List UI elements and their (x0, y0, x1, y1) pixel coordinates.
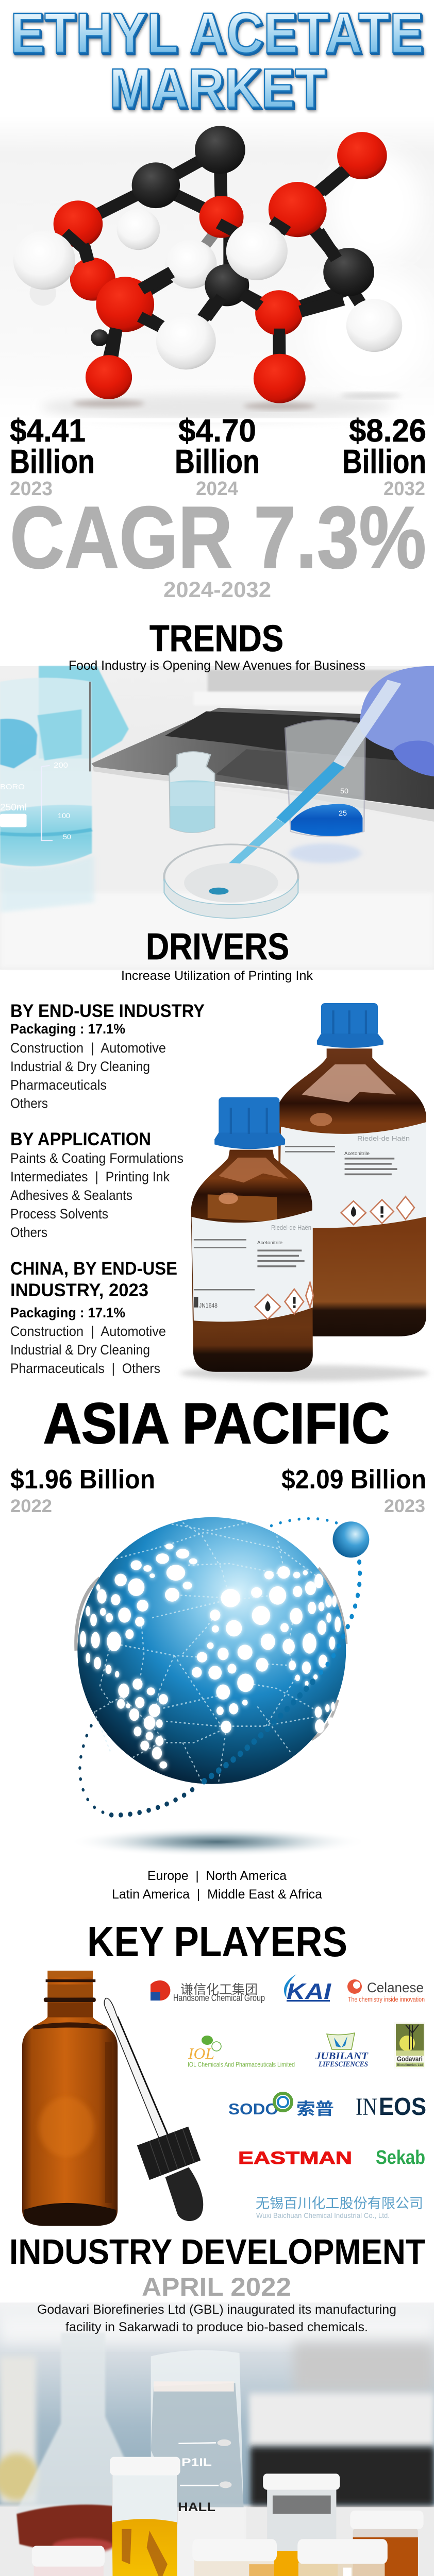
illustration: amber dropper bottle (22, 1971, 203, 2226)
stat: 2032 market size: 2032 (383, 478, 425, 500)
block: by application: Process Solvents (10, 1206, 108, 1222)
block: china by end-use industry: Industrial & Dry Cleaning (10, 1342, 150, 1358)
stat: asia pacific 2022 (10, 1465, 155, 1516)
block: china by end-use industry: Construction | Automotive (10, 1324, 166, 1339)
logo: INEOS (356, 2093, 426, 2121)
logo: Jubilant Life Sciences (315, 2033, 369, 2069)
logo: Eastman: EASTMAN (238, 2148, 352, 2168)
logo: Godavari Biorefineries: Godavari (397, 2055, 423, 2063)
illustration: globe with orbit (68, 1517, 369, 1857)
stat: asia pacific 2023: 2023 (384, 1496, 425, 1516)
illustration: ball-and-stick molecule (13, 126, 402, 410)
logo: Godavari Biorefineries (394, 2022, 425, 2069)
drivers text: Increase Utilization of Printing Ink (121, 969, 313, 983)
stat: 2023 market size (10, 413, 95, 500)
stat: 2023 market size: $4.41 (10, 413, 86, 449)
block: china by end-use industry: Packaging : 17.1% (10, 1305, 125, 1320)
block: by application: Paints & Coating Formulations (10, 1150, 183, 1166)
logo: KAI: KAI (287, 1979, 331, 2004)
logo: IOL Chemicals: IOL Chemicals And Pharmaceuticals Limited (188, 2061, 295, 2069)
logo: Godavari Biorefineries: Biorefineries Ltd (397, 2063, 423, 2067)
panel: trends lab photo: 100 (58, 811, 70, 820)
logo: Wuxi Baichuan Chemical: 无锡百川化工股份有限公司 (256, 2196, 423, 2211)
panel: trends lab photo: 250ml (0, 802, 27, 812)
logo: Celanese (347, 1979, 425, 2003)
development date: APRIL 2022 (142, 2273, 291, 2301)
illustration: amber solvent bottles (180, 1003, 429, 1381)
panel: trends lab photo (0, 666, 434, 970)
panel: industry development lab photo: P1IL (181, 2456, 212, 2468)
stat: asia pacific 2023 (281, 1465, 426, 1516)
other regions list (112, 1869, 322, 1902)
logo: SODO: SODO (228, 2100, 278, 2118)
panel: trends lab photo: 50 (63, 833, 71, 841)
development description: Godavari Biorefineries Ltd (GBL) inaugurated its manufacturing (37, 2302, 396, 2317)
stat: asia pacific 2022: 2022 (10, 1496, 52, 1516)
stat: 2024 market size: $4.70 (178, 413, 256, 449)
stat: 2023 market size: 2023 (10, 478, 53, 500)
heading: key players: KEY PLAYERS (87, 1918, 347, 1965)
logo: Celanese: Celanese (367, 1980, 424, 1995)
panel: trends lab photo: 25 (339, 809, 347, 817)
logo: INEOS: IN (356, 2093, 377, 2121)
logo: SODO: 索普 (296, 2099, 334, 2118)
logo: IOL Chemicals (188, 2036, 295, 2069)
panel: industry development lab photo (0, 2302, 434, 2576)
stat: 2024 market size (175, 413, 260, 500)
title (10, 2, 424, 119)
logo: Jubilant Life Sciences: JUBILANT (315, 2050, 369, 2062)
panel: trends lab photo: 200 (54, 761, 68, 770)
stat: asia pacific 2023: $2.09 Billion (281, 1465, 426, 1495)
block: by end-use industry: Pharmaceuticals (10, 1077, 107, 1093)
block: by end-use industry: Packaging : 17.1% (10, 1021, 125, 1037)
block: china by end-use industry: INDUSTRY, 2023 (10, 1280, 148, 1300)
block: china by end-use industry: Pharmaceuticals | Others (10, 1361, 160, 1376)
block: by application: BY APPLICATION (10, 1129, 151, 1149)
illustration: amber solvent bottles: Acetonitrile (344, 1151, 370, 1156)
development description: facility in Sakarwadi to produce bio-based chemicals. (65, 2320, 368, 2334)
block: china by end-use industry: CHINA, BY END-USE (10, 1259, 177, 1279)
logo: Jubilant Life Sciences: LIFESCIENCES (318, 2060, 368, 2069)
heading: trends: TRENDS (149, 618, 283, 659)
heading: asia pacific: ASIA PACIFIC (43, 1392, 390, 1455)
logo: KAI (284, 1974, 331, 2004)
panel: industry development lab photo: HALL (178, 2500, 215, 2514)
block: by application: Others (10, 1225, 47, 1240)
panel: trends lab photo: BORO (0, 783, 25, 791)
logo: IOL Chemicals: IOL (188, 2044, 214, 2062)
logo: SODO (228, 2093, 334, 2118)
block: by application (10, 1129, 183, 1240)
panel: trends lab photo: 50 (340, 787, 348, 795)
other regions list: Europe | North America (147, 1869, 287, 1883)
logo: Handsome Chemical Group: Handsome Chemical Group (173, 1993, 265, 2003)
logo: Sekab: Sekab (376, 2147, 425, 2168)
stat: 2032 market size: $8.26 (349, 413, 426, 449)
illustration: amber solvent bottles: Riedel-de Haën (271, 1224, 311, 1231)
block: by end-use industry: Others (10, 1095, 48, 1111)
block: by application: Intermediates | Printing Ink (10, 1169, 170, 1184)
stat: 2024 market size: 2024 (196, 478, 238, 500)
illustration: amber solvent bottles: Acetonitrile (257, 1240, 282, 1245)
block: by end-use industry: Construction | Automotive (10, 1040, 166, 1056)
logo: INEOS: EOS (379, 2093, 426, 2121)
CAGR period: 2024-2032 (163, 578, 271, 602)
panel: molecule background (0, 116, 434, 422)
block: by end-use industry (10, 1001, 205, 1111)
logo: Wuxi Baichuan Chemical: Wuxi Baichuan Chemical Industrial Co., Ltd. (256, 2211, 390, 2219)
stat: asia pacific 2022: $1.96 Billion (10, 1465, 155, 1495)
heading: drivers: DRIVERS (146, 926, 289, 968)
title: MARKET (109, 57, 326, 119)
illustration: amber solvent bottles: JN1648 (199, 1302, 218, 1309)
logo: Wuxi Baichuan Chemical (256, 2196, 423, 2219)
block: by end-use industry: Industrial & Dry Cleaning (10, 1059, 150, 1074)
logo: Handsome Chemical Group: 谦信化工集团 (180, 1982, 258, 1997)
block: china by end-use industry (10, 1259, 177, 1376)
trends text: Food Industry is Opening New Avenues for Business (69, 658, 365, 673)
other regions list: Latin America | Middle East & Africa (112, 1887, 322, 1902)
stat: 2023 market size: Billion (10, 443, 95, 480)
stat: 2032 market size (342, 413, 426, 500)
logo: Handsome Chemical Group (151, 1980, 265, 2003)
illustration: amber solvent bottles: Riedel-de Haën (357, 1134, 410, 1142)
development description (37, 2302, 396, 2334)
stat: 2024 market size: Billion (175, 443, 260, 480)
block: by end-use industry: BY END-USE INDUSTRY (10, 1001, 205, 1021)
block: by application: Adhesives & Sealants (10, 1188, 132, 1203)
